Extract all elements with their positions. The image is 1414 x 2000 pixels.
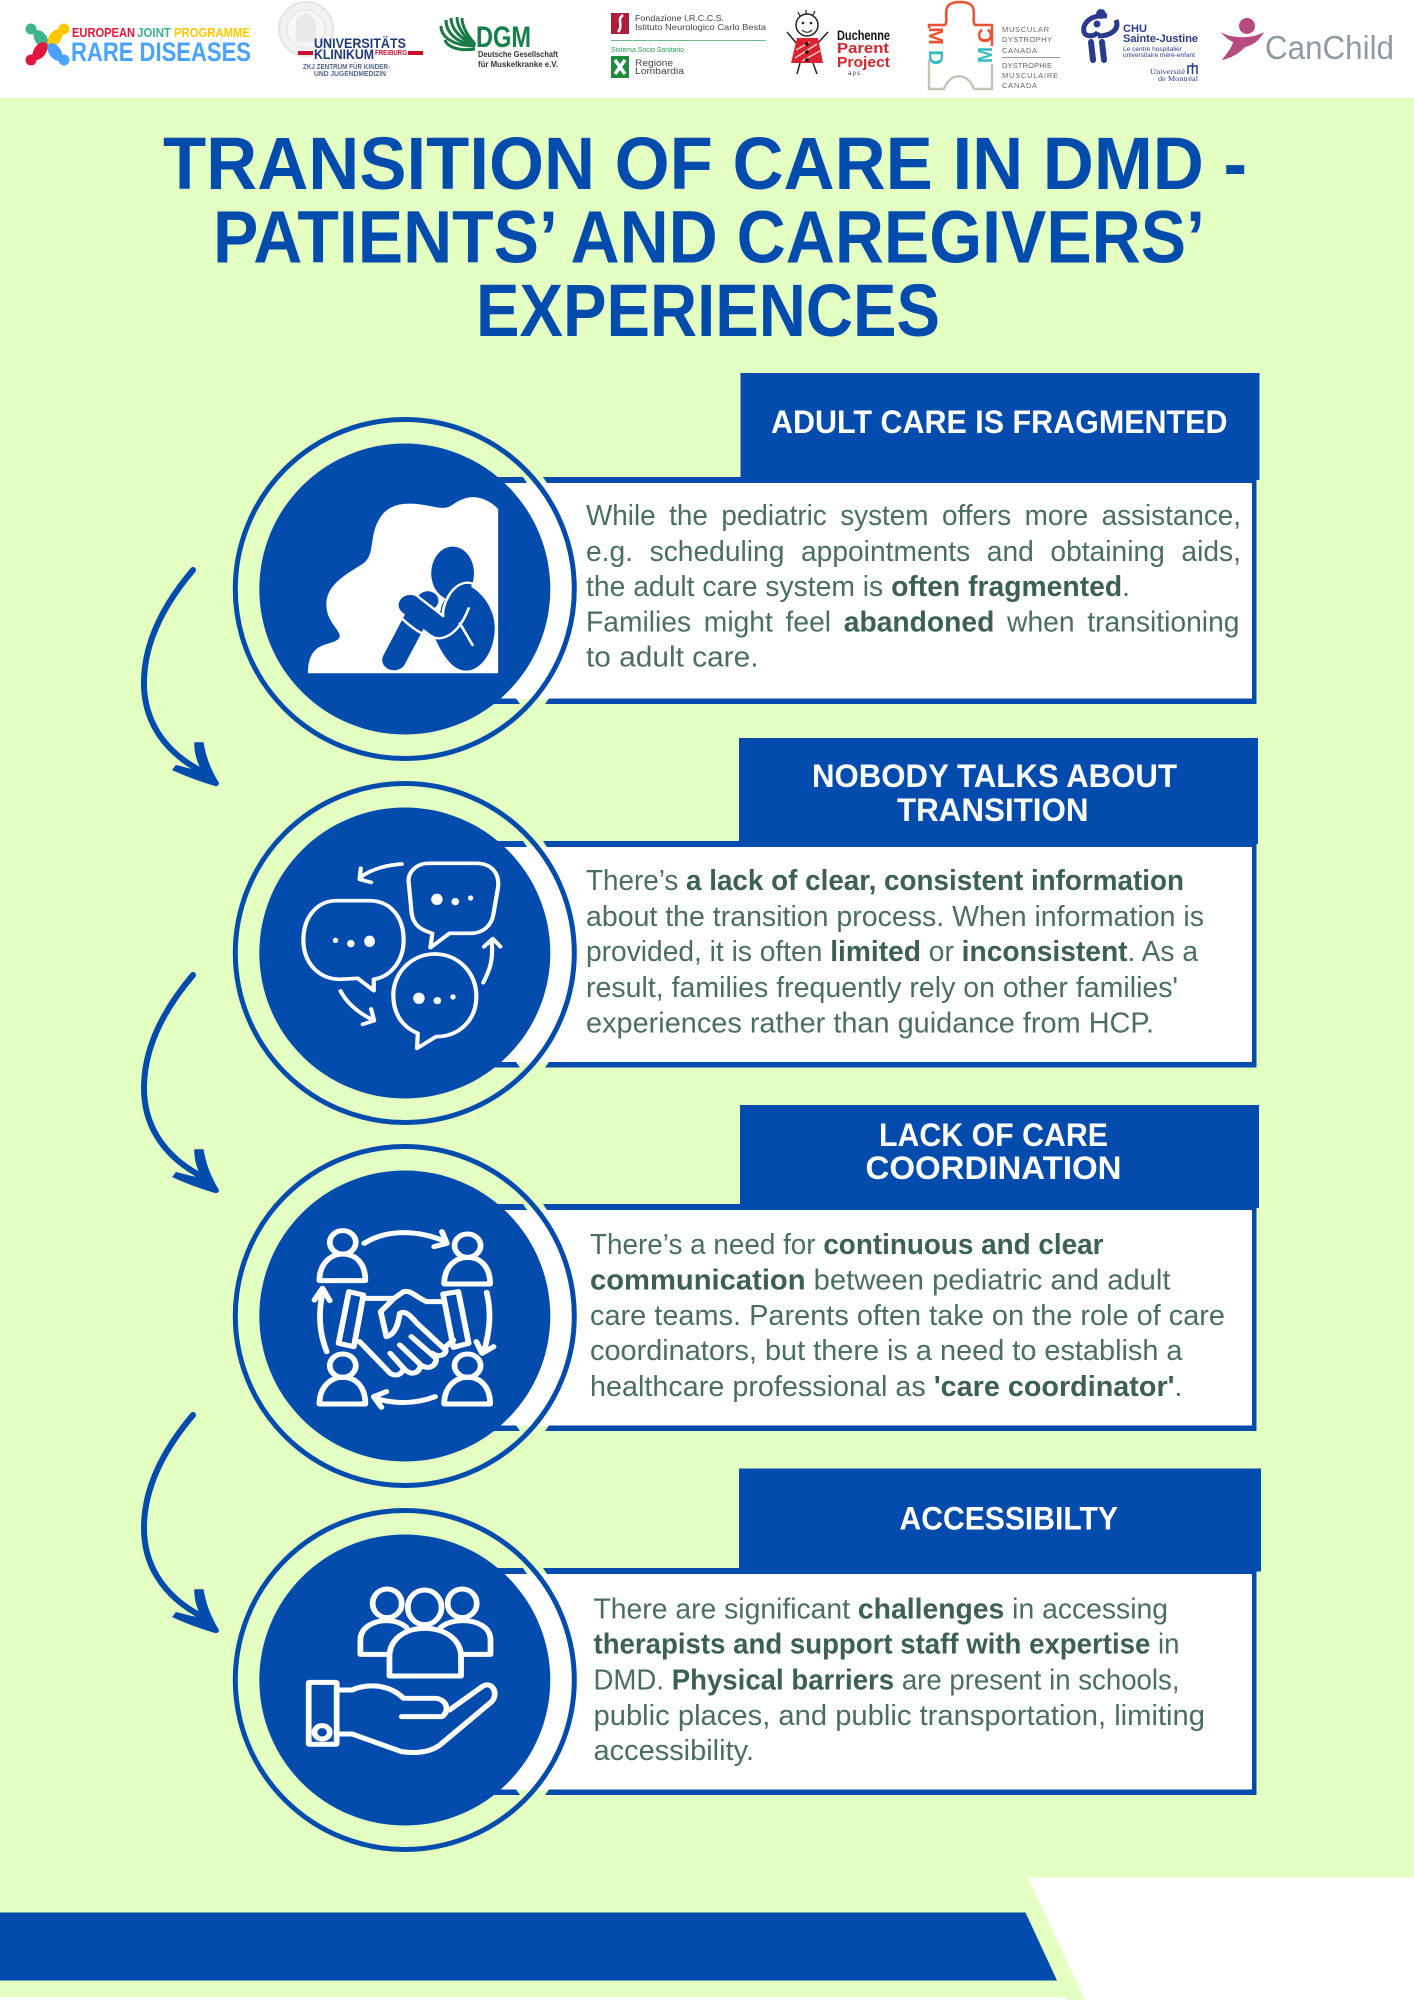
footer: white corner bbox=[1028, 1878, 1414, 2000]
logo: Duchenne Parent Project: Duchenne bbox=[837, 27, 890, 43]
text block: care teams. Parents often take on the role of care bbox=[590, 1300, 1225, 1332]
logo: Muscular Dystrophy Canada bbox=[924, 2, 1060, 90]
logo: CanChild: CanChild bbox=[1265, 29, 1394, 66]
heading: accessibilty bbox=[739, 1468, 1261, 1572]
text block: There’s a lack of clear, consistent information bbox=[586, 865, 1184, 897]
heading: nobody talks about transition: NOBODY TALKS ABOUT bbox=[812, 758, 1177, 794]
text block: Families might feel abandoned when transitioning bbox=[586, 606, 1240, 638]
logo: Fondazione Besta and Regione Lombardia: Lombardia bbox=[635, 66, 684, 76]
footer: white base strip bbox=[0, 1997, 1067, 2000]
logo: European Joint Programme Rare Diseases: EUROPEAN bbox=[72, 25, 135, 40]
footer: blue bar bbox=[0, 1912, 1057, 1980]
logo: DGM: DGM bbox=[476, 21, 531, 54]
text block: experiences rather than guidance from HCP. bbox=[586, 1008, 1154, 1040]
panel: lack of care coordination bbox=[235, 1105, 1259, 1486]
logo: CHU Sainte-Justine: Sainte-Justine bbox=[1123, 33, 1198, 45]
logo: European Joint Programme Rare Diseases bbox=[26, 24, 251, 67]
icon: handshake with four people bbox=[314, 1231, 494, 1407]
text block: therapists and support staff with expertise in bbox=[594, 1628, 1179, 1660]
text block: healthcare professional as 'care coordinator'. bbox=[590, 1371, 1182, 1403]
logo: Fondazione Besta and Regione Lombardia: Sistema Socio Sanitario bbox=[611, 47, 684, 54]
icon: person hugging knees bbox=[308, 497, 498, 673]
heading: nobody talks about transition bbox=[739, 738, 1258, 844]
logo: Universitätsklinikum Freiburg: UND JUGENDMEDIZIN bbox=[314, 71, 386, 78]
logo: Fondazione Besta and Regione Lombardia: Istituto Neurologico Carlo Besta bbox=[635, 22, 766, 32]
logo: Muscular Dystrophy Canada: M bbox=[924, 27, 946, 45]
logo: CHU Sainte-Justine bbox=[1084, 9, 1198, 83]
text block: There are significant challenges in accessing bbox=[594, 1594, 1168, 1626]
logo: Muscular Dystrophy Canada: M bbox=[975, 47, 997, 63]
text block: about the transition process. When information is bbox=[586, 901, 1204, 933]
logo: CHU Sainte-Justine: Université bbox=[1150, 68, 1185, 76]
logo: European Joint Programme Rare Diseases: JOINT bbox=[137, 25, 171, 40]
panel: nobody talks about transition bbox=[235, 738, 1258, 1122]
text block: to adult care. bbox=[586, 642, 758, 674]
heading: adult care is fragmented bbox=[740, 373, 1260, 480]
text block: the adult care system is often fragmented. bbox=[586, 571, 1130, 603]
heading: accessibilty: ACCESSIBILTY bbox=[900, 1500, 1118, 1536]
logo: Universitätsklinikum Freiburg: UNIVERSITÄTS bbox=[314, 35, 406, 51]
logo: DGM bbox=[441, 17, 558, 69]
arrow 2 bbox=[144, 975, 219, 1193]
logo: Fondazione Besta and Regione Lombardia: Regione bbox=[635, 58, 673, 68]
logo: Fondazione Besta and Regione Lombardia bbox=[611, 13, 766, 78]
heading: adult care is fragmented: ADULT CARE IS FRAGMENTED bbox=[771, 404, 1228, 440]
logo: European Joint Programme Rare Diseases: PROGRAMME bbox=[174, 25, 250, 40]
text block: provided, it is often limited or inconsistent. As a bbox=[586, 936, 1199, 968]
logo: Muscular Dystrophy Canada: CANADA bbox=[1002, 46, 1037, 55]
logo: Muscular Dystrophy Canada: MUSCULAR bbox=[1002, 25, 1050, 34]
logo: Universitätsklinikum Freiburg bbox=[279, 2, 423, 78]
logo: Muscular Dystrophy Canada: DYSTROPHY bbox=[1002, 35, 1052, 44]
title: EXPERIENCES bbox=[476, 269, 940, 352]
logo: Universitätsklinikum Freiburg: FREIBURG bbox=[375, 50, 407, 57]
text block: public places, and public transportation, limiting bbox=[594, 1700, 1205, 1732]
text block: result, families frequently rely on other families' bbox=[586, 972, 1178, 1004]
icon: speech bubbles bbox=[303, 863, 500, 1048]
logo: CHU Sainte-Justine: CHU bbox=[1123, 23, 1147, 35]
text block bbox=[586, 500, 1241, 674]
text block: coordinators, but there is a need to establish a bbox=[590, 1335, 1183, 1367]
logo: European Joint Programme Rare Diseases: RARE DISEASES bbox=[71, 37, 251, 67]
logo: Muscular Dystrophy Canada: MUSCULAIRE bbox=[1002, 71, 1058, 80]
logo: Muscular Dystrophy Canada: DYSTROPHIE bbox=[1002, 61, 1052, 70]
arrow 3 bbox=[144, 1415, 219, 1633]
heading: lack of care coordination: COORDINATION bbox=[866, 1150, 1122, 1186]
heading: lack of care coordination: LACK OF CARE bbox=[879, 1117, 1108, 1153]
text block bbox=[594, 1594, 1205, 1767]
title: PATIENTS’ AND CAREGIVERS’ bbox=[213, 196, 1205, 278]
logo: CanChild bbox=[1221, 18, 1394, 66]
logo: Duchenne Parent Project: aps bbox=[848, 71, 860, 77]
icon: hand holding group of people bbox=[309, 1589, 495, 1753]
logo: DGM: Deutsche Gesellschaft bbox=[478, 49, 558, 59]
text block: e.g. scheduling appointments and obtaining aids, bbox=[586, 536, 1241, 568]
logo: CHU Sainte-Justine: Le centre hospitalier bbox=[1123, 47, 1182, 53]
heading: lack of care coordination bbox=[740, 1105, 1259, 1208]
text block bbox=[586, 865, 1204, 1040]
logo: Universitätsklinikum Freiburg: KLINIKUM bbox=[314, 46, 374, 62]
logo: Universitätsklinikum Freiburg: ZKJ ZENTRUM FÜR KINDER- bbox=[303, 62, 391, 71]
panel: accessibility bbox=[235, 1468, 1261, 1850]
text block bbox=[590, 1229, 1225, 1403]
text block: While the pediatric system offers more assistance, bbox=[586, 500, 1241, 532]
logo: Duchenne Parent Project: Project bbox=[837, 54, 890, 71]
text block: DMD. Physical barriers are present in schools, bbox=[594, 1664, 1180, 1696]
logo: Fondazione Besta and Regione Lombardia: Fondazione I.R.C.C.S. bbox=[635, 13, 724, 23]
logo strip bbox=[0, 0, 1414, 98]
arrow 1 bbox=[144, 570, 219, 786]
logo: Duchenne Parent Project bbox=[787, 10, 890, 77]
logo: Muscular Dystrophy Canada: D bbox=[924, 50, 946, 65]
logo: DGM: für Muskelkranke e.V. bbox=[478, 59, 558, 69]
panel: adult care is fragmented bbox=[235, 373, 1259, 758]
logo: Duchenne Parent Project: Parent bbox=[837, 40, 889, 57]
logo: CHU Sainte-Justine: de Montréal bbox=[1158, 75, 1198, 83]
title bbox=[163, 122, 1247, 352]
title: TRANSITION OF CARE IN DMD - bbox=[163, 122, 1247, 205]
logo: Muscular Dystrophy Canada: C bbox=[975, 28, 997, 43]
logo: Muscular Dystrophy Canada: CANADA bbox=[1002, 81, 1037, 90]
text block: accessibility. bbox=[594, 1735, 754, 1767]
text block: There’s a need for continuous and clear bbox=[590, 1229, 1104, 1261]
logo: CHU Sainte-Justine: universitaire mère-enfant bbox=[1123, 53, 1195, 59]
text block: communication between pediatric and adult bbox=[590, 1264, 1170, 1296]
heading: nobody talks about transition: TRANSITION bbox=[897, 792, 1088, 828]
